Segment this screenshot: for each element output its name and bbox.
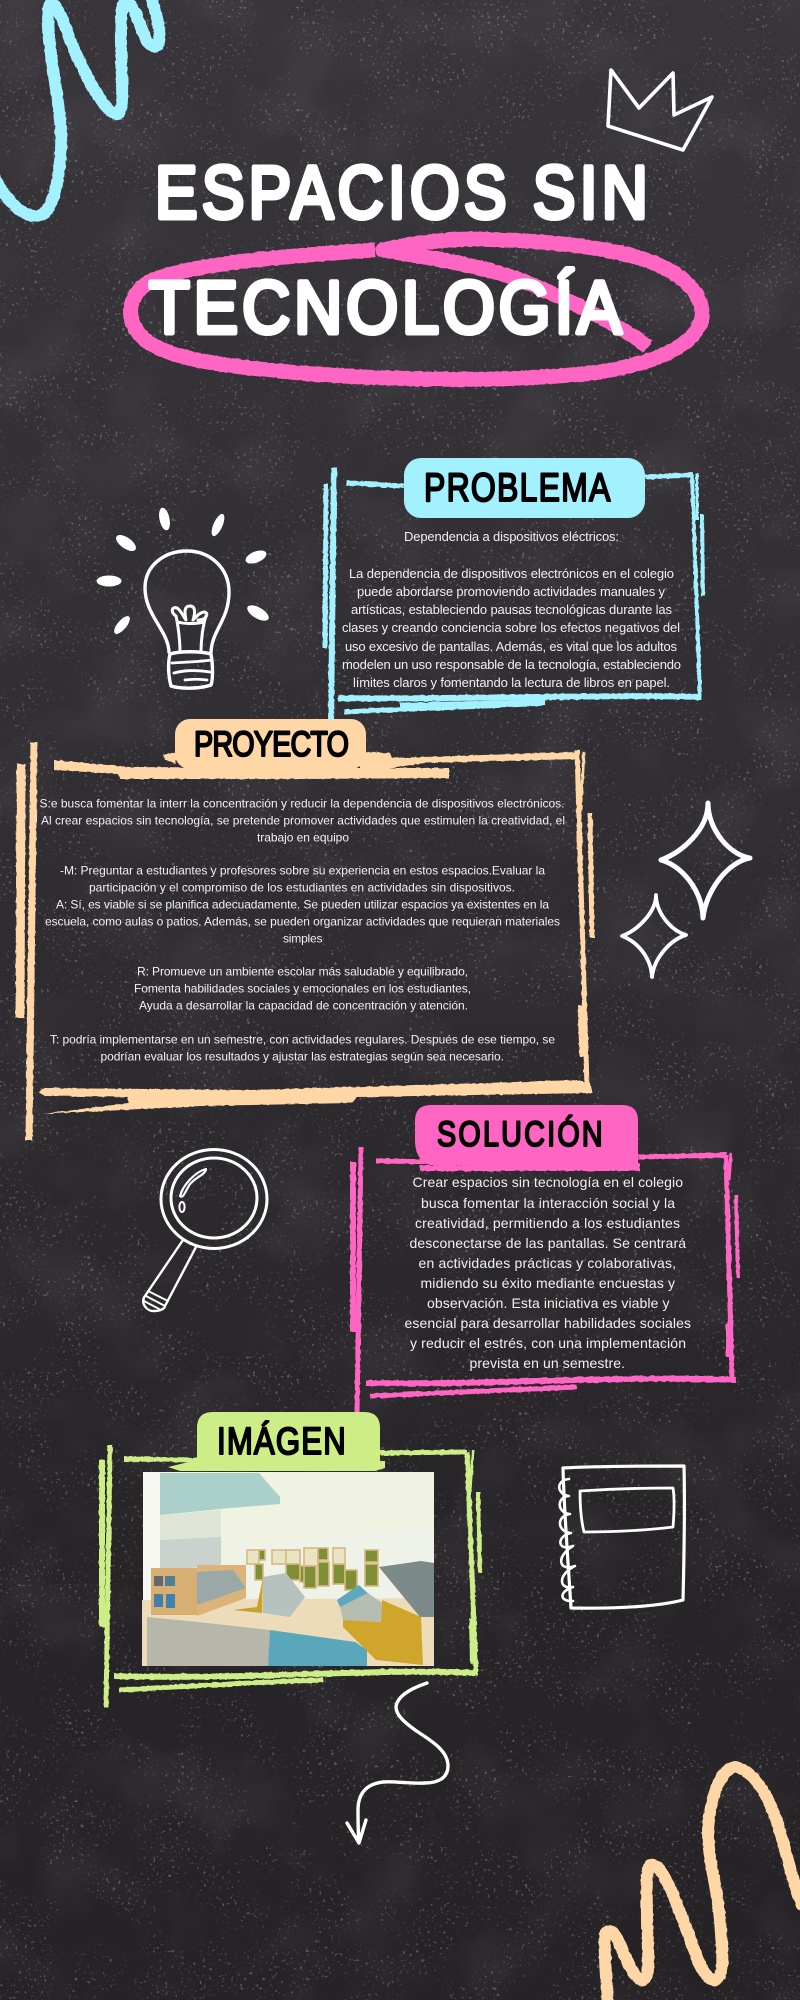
text: proyecto body: simples [283,932,322,946]
frame: problema brush strokes [325,468,703,722]
arrow: curly down arrow [347,1683,448,1843]
peach scribble bottom right [605,1767,800,2000]
text: proyecto body: Al crear espacios sin tecnología, se pretende promover actividades que estimulen la creatividad, el [41,814,565,828]
icon: small sparkle [622,895,686,977]
photo: lounge with sofas [142,1472,434,1666]
text: solución body: prevista en un semestre. [470,1355,625,1371]
title line two: TECNOLOGÍA [149,266,622,349]
text: proyecto body: Fomenta habilidades sociales y emocionales en los estudiantes, [134,982,471,996]
text: problema body: La dependencia de dispositivos electrónicos en el colegio [349,566,674,581]
panel: problema [325,458,703,722]
text: proyecto body: T: podría implementarse en un semestre, con actividades regulares. Después de ese tiempo, se [50,1032,555,1046]
text: proyecto body [40,796,565,1064]
heading: proyecto: PROYECTO [194,724,349,764]
title line one: ESPACIOS SIN [155,152,648,234]
text: problema body: límites claros y fomentando la lectura de libros en papel. [353,675,670,690]
panel: imagen [102,1412,480,1707]
text: solución body: en actividades prácticas y colaborativas, [418,1255,676,1271]
text: proyecto body: A: Sí, es viable si se planifica adecuadamente. Se pueden utilizar espacios ya existentes en la [56,898,549,912]
text: problema body: clases y creando conciencia sobre los efectos negativos del [342,620,680,635]
tag: problema [404,458,645,518]
heading: imagen: IMÁGEN [217,1420,346,1463]
text: proyecto body: -M: Preguntar a estudiantes y profesores sobre su experiencia en estos espacios.Evaluar la [60,864,545,878]
text: problema body: Dependencia a dispositivos eléctricos: [404,529,619,544]
panel: proyecto [20,719,592,1140]
heading: solución: SOLUCIÓN [437,1114,603,1154]
text: problema body: uso excesivo de pantallas. Además, es vital que los adultos [345,639,678,654]
tag: proyecto [175,719,366,769]
text: proyecto body: podrían evaluar los resultados y ajustar las estrategias según sea necesario. [100,1050,504,1064]
text: problema body: puede abordarse promoviendo actividades manuales y [357,584,666,599]
text: problema body: modelen un uso responsable de la tecnología, estableciendo [342,657,681,672]
text: proyecto body: participación y el compromiso de los estudiantes en actividades sin dispositivos. [89,880,515,894]
cyan scribble top left [0,0,160,216]
text: proyecto body: S:e busca fomentar la interr la concentración y reducir la dependencia de dispositivos electrónicos. [40,796,564,810]
frame: imagen brush strokes [102,1445,480,1707]
frame: proyecto brush strokes [20,742,592,1140]
text: solución body: esencial para desarrollar habilidades sociales [404,1315,691,1331]
icon: crown [608,70,712,150]
text: proyecto body: R: Promueve un ambiente escolar más saludable y equilibrado, [137,964,468,978]
text: problema body: artísticas, estableciendo pausas tecnológicas durante las [351,602,672,617]
icon: magnifying glass [143,1150,267,1311]
icon: lightbulb [96,507,271,688]
text: solución body [404,1174,691,1371]
text: proyecto body: Ayuda a desarrollar la capacidad de concentración y atención. [139,998,468,1012]
title [130,152,702,379]
panel: solución [353,1105,738,1412]
heading: problema: PROBLEMA [424,465,611,510]
text: proyecto body: escuela, como aulas o patios. Además, se pueden organizar actividades que requieran materiales [45,914,560,928]
text: solución body: observación. Esta iniciativa es viable y [427,1295,670,1311]
text: solución body: busca fomentar la interacción social y la [421,1195,675,1211]
light rays [96,507,271,636]
text: solución body: y reducir el estrés, con una implementación [410,1335,686,1351]
frame: solución brush strokes [353,1147,738,1412]
icon: spiral notebook [559,1466,684,1608]
tag: solución [415,1105,638,1165]
text: solución body: creatividad, permitiendo a los estudiantes [415,1215,680,1231]
pink ellipse scribble around title word [130,239,702,379]
text: solución body: midiendo su éxito mediante encuestas y [420,1275,675,1291]
photo: wooden screen with green panels [247,1548,378,1590]
tag: imagen [168,1412,385,1471]
text: solución body: desconectarse de las pantallas. Se centrará [410,1235,686,1251]
text: solución body: Crear espacios sin tecnología en el colegio [412,1174,683,1190]
text: proyecto body: trabajo en equipo [257,830,349,844]
text: problema body [342,529,681,690]
icon: large sparkle [661,803,750,918]
